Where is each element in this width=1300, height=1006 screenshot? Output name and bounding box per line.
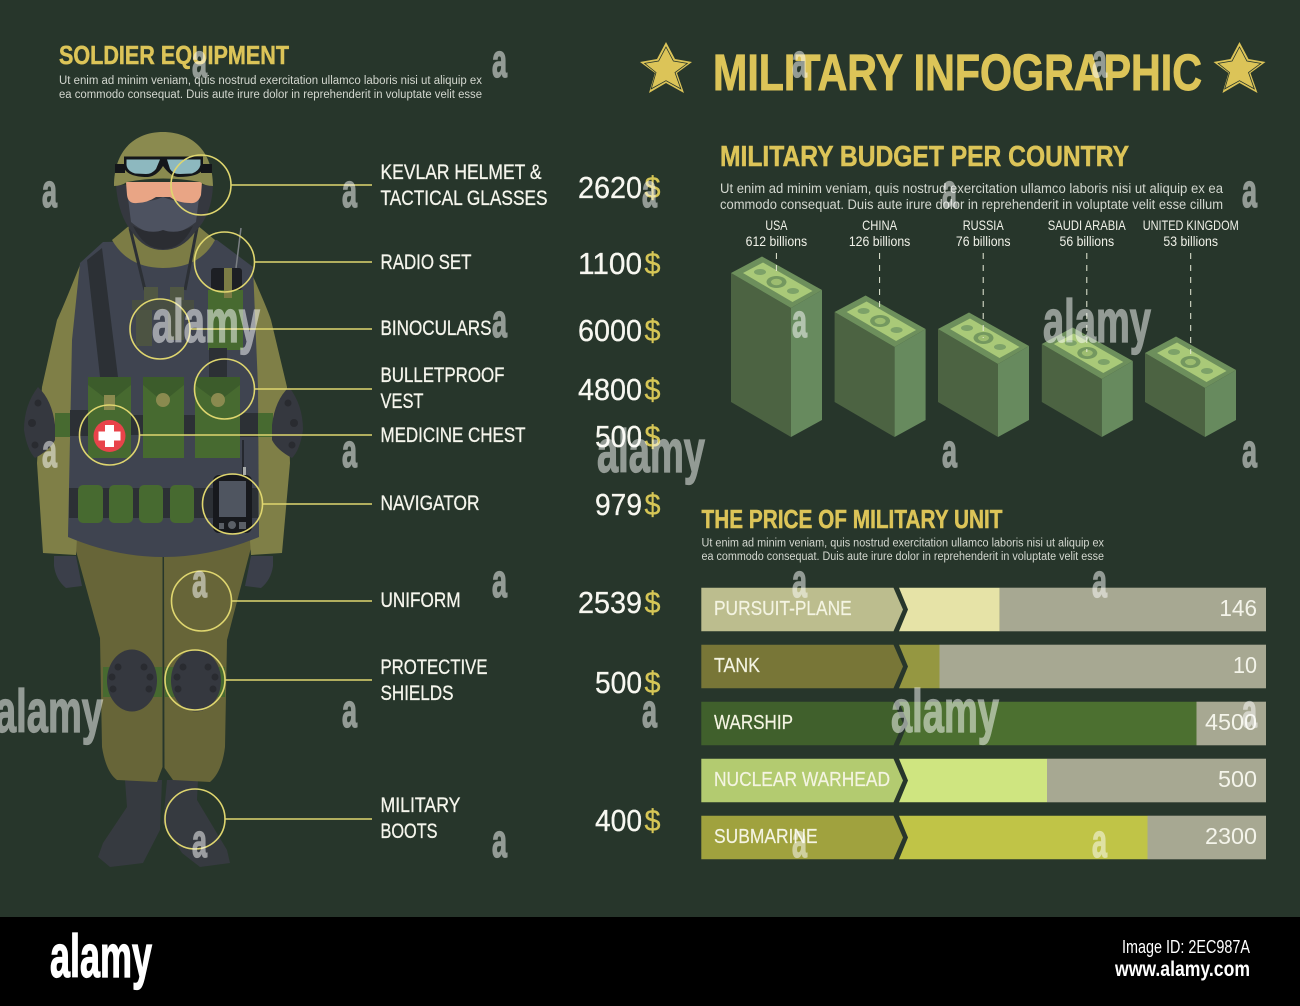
equipment labels: PROTECTIVE [380,656,488,679]
equipment labels: KEVLAR HELMET & [380,161,542,184]
watermark overlay: a [1092,814,1107,867]
image id: Image ID: 2EC987A [1122,937,1250,957]
equipment prices [578,170,660,838]
trousers [73,540,253,782]
watermark overlay: a [642,164,657,217]
knee pads [107,650,221,712]
watermark overlay: a [492,294,507,347]
bar: nuclear warhead: NUCLEAR WARHEAD [714,769,890,791]
watermark overlay: a [792,294,807,347]
watermark overlay: a [342,164,357,217]
watermark overlay: alamy [0,678,103,745]
vest strap [87,248,118,377]
watermark overlay: a [42,164,57,217]
money stack: USA [731,256,822,437]
watermark overlay: a [192,814,207,867]
equipment labels: SHIELDS [380,682,454,705]
bar: pursuit-plane: PURSUIT-PLANE [714,598,852,620]
equipment labels: MEDICINE CHEST [380,424,526,447]
chest pouches [88,348,240,458]
bar: tank: 10 [1233,652,1257,678]
equipment prices: $ [644,170,660,205]
watermark overlay: a [792,34,807,87]
footer logo: alamy [50,923,152,990]
text block: budget intro [720,181,1223,212]
bar: submarine [701,816,1266,859]
money stack: China [835,296,926,437]
sleeves [37,263,290,555]
text block: soldier equipment intro [59,75,482,101]
equipment labels: BOOTS [380,820,438,843]
text block: soldier equipment intro: Ut enim ad minim veniam, quis nostrud exercitation ullamco laboris nisi ut aliquip ex [59,75,482,87]
country labels: 612 billions [746,233,807,249]
money stack: United Kingdom [1145,336,1236,437]
icon: boots [98,780,230,867]
equipment labels: RADIO SET [380,251,472,274]
text block: budget intro: Ut enim ad minim veniam, quis nostrud exercitation ullamco laboris nisi ut aliquip ex ea [720,181,1223,196]
vest [68,240,259,557]
watermark overlay: a [192,34,207,87]
equipment prices: 2620 [578,170,642,205]
footer bar [0,917,1300,1006]
watermark overlay: a [492,34,507,87]
watermark overlay: a [942,164,957,217]
equipment prices: $ [644,585,660,620]
country labels: 56 billions [1060,233,1114,249]
country labels: USA [765,217,788,233]
equipment labels: NAVIGATOR [380,492,480,515]
bar: nuclear warhead [701,759,1266,802]
website: www.alamy.com [1114,958,1250,981]
watermark overlay: a [792,814,807,867]
watermark overlay: alamy [597,418,705,485]
country labels: 126 billions [849,233,910,249]
soldier illustration [24,132,303,867]
equipment prices: $ [644,803,660,838]
text block: budget intro: commodo consequat. Duis aute irure dolor in reprehenderit in voluptate velit esse cillum [720,197,1223,212]
watermark overlay: a [1242,424,1257,477]
watermark overlay: alamy [152,288,260,355]
dashed leaders to stacks [776,253,1191,354]
country labels: 53 billions [1163,233,1218,249]
watermark overlay: a [1092,34,1107,87]
bar: submarine: SUBMARINE [714,826,818,848]
text block: price intro: Ut enim ad minim veniam, quis nostrud exercitation ullamco laboris nisi ut aliquip ex [702,538,1104,550]
equipment prices: 2539 [578,585,642,620]
country labels: RUSSIA [963,217,1004,233]
elbow pad studs [28,400,298,448]
icon: right star [1214,42,1266,93]
callout circles and leader lines [80,155,372,849]
watermark overlay: a [192,554,207,607]
equipment labels: UNIFORM [380,589,460,612]
money stack: Saudi Arabia [1042,328,1133,437]
equipment labels: BINOCULARS [380,317,492,340]
belt [55,410,273,437]
bar: submarine: 2300 [1205,823,1257,849]
country labels: SAUDI ARABIA [1048,217,1126,233]
heading: price of military unit: THE PRICE OF MILITARY UNIT [702,504,1003,534]
text block: soldier equipment intro: ea commodo consequat. Duis aute irure dolor in reprehenderit in voluptate velit esse [59,89,482,101]
text block: price intro: ea commodo consequat. Duis aute irure dolor in reprehenderit in voluptate velit esse [702,551,1104,563]
watermark overlay: a [492,814,507,867]
watermark overlay: a [942,424,957,477]
country labels: CHINA [862,217,898,233]
bar: pursuit-plane: 146 [1219,595,1257,621]
bar: warship: WARSHIP [714,712,793,734]
country labels: 76 billions [956,233,1010,249]
country labels: UNITED KINGDOM [1143,217,1239,233]
equipment prices: $ [644,246,660,281]
bar: tank [701,645,1266,688]
watermark overlay: a [492,554,507,607]
equipment prices: 6000 [578,313,642,348]
collar [112,225,215,268]
equipment prices: 500 [595,419,642,454]
money stack: Russia [938,312,1029,437]
bar: pursuit-plane [701,588,1266,631]
country labels [746,217,1239,249]
watermark overlay: a [1242,164,1257,217]
bar: warship [701,702,1266,745]
bar: warship: 4500 [1205,709,1257,735]
equipment prices: 500 [595,665,642,700]
watermark overlay: a [642,684,657,737]
icon: left star [640,42,692,93]
watermark overlay: a [42,424,57,477]
gloves [54,556,273,588]
knee band [103,667,225,697]
equipment prices: 4800 [578,372,642,407]
watermark overlay: a [1092,554,1107,607]
equipment prices: $ [644,313,660,348]
equipment labels: VEST [380,390,424,413]
heading: soldier equipment: SOLDIER EQUIPMENT [59,40,289,70]
equipment labels: MILITARY [380,794,460,817]
equipment prices: $ [644,487,660,522]
equipment prices: 1100 [578,246,642,281]
watermark overlay: a [342,424,357,477]
icon: navigator [213,440,252,533]
binoculars [130,228,197,346]
equipment prices: 979 [595,487,642,522]
icon: kevlar helmet [114,132,213,186]
bar: tank: TANK [714,655,761,677]
icon: radio set [208,228,243,378]
text block: price intro [702,538,1104,563]
equipment prices: $ [644,665,660,700]
bar: nuclear warhead: 500 [1218,766,1257,792]
watermark overlay: a [792,554,807,607]
equipment prices: 400 [595,803,642,838]
equipment prices: $ [644,419,660,454]
equipment labels: TACTICAL GLASSES [380,187,548,210]
equipment labels: BULLETPROOF [380,364,504,387]
equipment prices: $ [644,372,660,407]
head [116,182,213,250]
heading: military budget: MILITARY BUDGET PER COUNTRY [720,141,1129,173]
watermark overlay: a [342,684,357,737]
lower belt pouches [69,485,258,523]
equipment labels [380,161,548,843]
watermark overlay: a [1242,684,1257,737]
watermark overlay: alamy [891,678,999,745]
icon: medicine chest [94,420,126,452]
elbow pads [24,387,303,458]
watermark overlay: alamy [1043,288,1151,355]
